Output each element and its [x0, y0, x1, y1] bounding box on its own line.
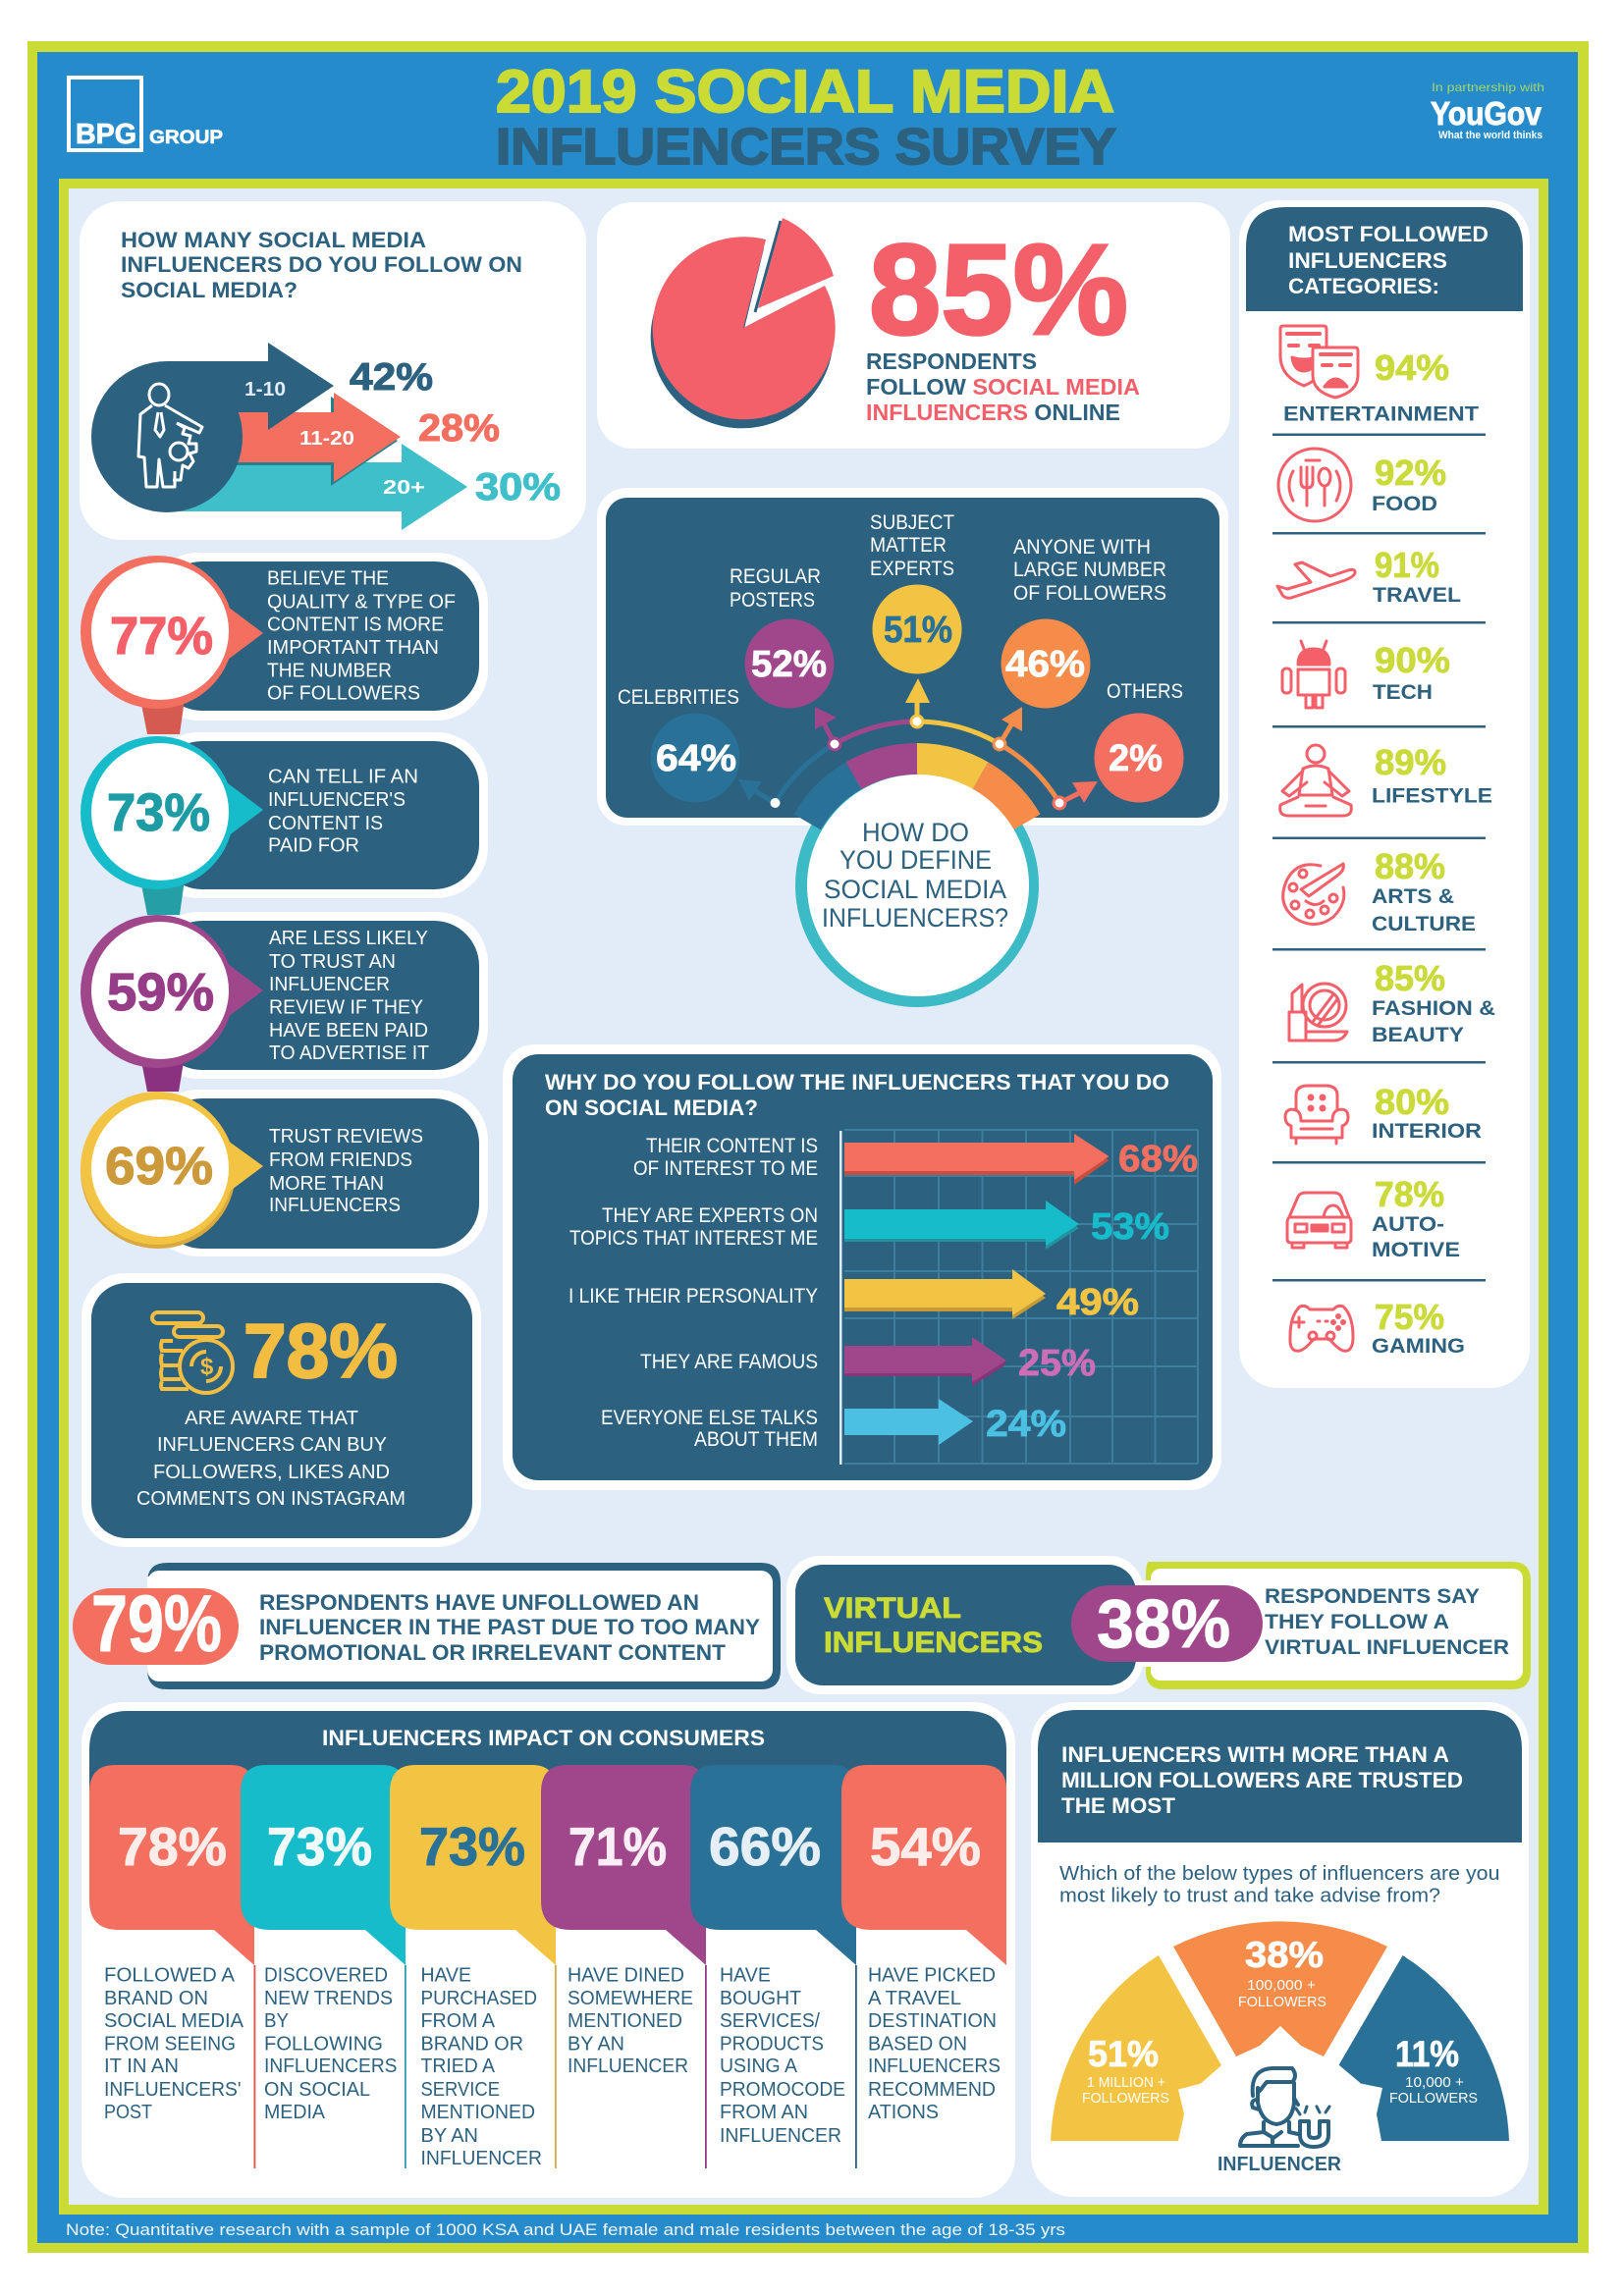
text: quality over followers: THE NUMBER	[267, 660, 392, 681]
text: unfollowed reason: PROMOTIONAL OR IRRELEVANT CONTENT	[259, 1640, 727, 1665]
heading: how many influencers: INFLUENCERS DO YOU FOLLOW ON	[121, 252, 522, 277]
stat circle: regular posters 52 percent: 52%	[751, 644, 827, 685]
text: travel destination: INFLUENCERS	[868, 2055, 1001, 2077]
text: follow virtual: VIRTUAL INFLUENCER	[1265, 1636, 1509, 1659]
text: less likely to trust: TO ADVERTISE IT	[269, 1042, 429, 1064]
panel: 78 percent buy followers: $	[200, 1354, 214, 1380]
text: aware can buy followers: FOLLOWERS, LIKES AND	[153, 1462, 390, 1483]
row: travel	[1277, 545, 1461, 607]
text: followed a brand: SOCIAL MEDIA	[104, 2009, 244, 2032]
row: gaming: 75%	[1375, 1297, 1444, 1337]
bar arrow: 24 percent	[844, 1399, 1066, 1445]
row: gaming: GAMING	[1372, 1335, 1465, 1358]
text: quality over followers	[267, 567, 456, 705]
text: discovered new trends: MEDIA	[264, 2101, 325, 2123]
icon: lipstick and mirror	[1289, 984, 1347, 1041]
segment: 51 percent: 51%	[1088, 2034, 1159, 2074]
stat circle: celebrities 64 percent: 64%	[656, 738, 736, 779]
text: can tell if paid: INFLUENCER'S	[268, 789, 406, 811]
text: follow virtual: RESPONDENTS SAY	[1265, 1585, 1480, 1608]
text: followed a brand	[104, 1963, 244, 2123]
partner logo: YouGov: In partnership with	[1432, 80, 1544, 94]
icon: palette	[1283, 864, 1344, 925]
row: fashion and beauty: BEAUTY	[1372, 1024, 1464, 1046]
text: discovered new trends: DISCOVERED	[264, 1963, 388, 1987]
text: have dined: BY AN	[568, 2032, 624, 2056]
panel: 78 percent buy followers	[81, 1273, 481, 1547]
heading: impact: INFLUENCERS IMPACT ON CONSUMERS	[322, 1726, 765, 1750]
row: lifestyle: 89%	[1375, 742, 1446, 782]
row: tech: TECH	[1373, 681, 1433, 704]
card: 54 percent	[841, 1765, 1006, 2123]
arcs and arrows to circles	[738, 678, 1098, 809]
card: 73 percent discovered	[241, 1765, 406, 2168]
pill: 77 percent	[81, 553, 488, 734]
stat circle: celebrities 64 percent	[650, 713, 740, 803]
bar labels: THEIR CONTENT IS	[646, 1135, 818, 1157]
text: travel destination: A TRAVEL	[868, 1987, 961, 2009]
text: have dined: MENTIONED	[568, 2009, 682, 2032]
row: food	[1278, 449, 1446, 521]
text: respondents follow: INFLUENCERS ONLINE	[866, 400, 1120, 425]
text: less likely to trust: INFLUENCER	[269, 974, 390, 995]
card: 78 percent: 78%	[118, 1816, 227, 1877]
logo: BPG Group: BPG	[76, 119, 136, 150]
text: discovered new trends: ON SOCIAL	[264, 2078, 370, 2101]
row: entertainment: ENTERTAINMENT	[1283, 402, 1479, 426]
text: less likely to trust: TO TRUST AN	[269, 951, 396, 973]
card: 66 percent: 66%	[709, 1816, 821, 1877]
text: bought using promocode	[720, 1963, 845, 2147]
icon: meditating person	[1280, 745, 1351, 816]
row: tech	[1282, 640, 1450, 708]
center circle: how do you define	[793, 743, 1041, 1007]
chart: gauge	[1051, 1921, 1509, 2175]
segment: 11 percent: 11%	[1395, 2034, 1459, 2074]
text: discovered new trends: FOLLOWING	[264, 2032, 383, 2056]
icon: person with gear	[138, 384, 202, 487]
text: quality over followers: BELIEVE THE	[267, 567, 389, 589]
stat circle: regular posters 52 percent	[744, 618, 835, 709]
text: less likely to trust: HAVE BEEN PAID	[269, 1020, 428, 1041]
panel: most followed categories	[1239, 200, 1530, 1388]
logo: BPG Group: GROUP	[149, 128, 223, 148]
card: 66 percent	[690, 1765, 857, 2168]
pill: 59 percent: 59%	[107, 963, 214, 1022]
text: less likely to trust: REVIEW IF THEY	[269, 997, 423, 1019]
icon: game controller	[1290, 1306, 1353, 1351]
arrow: 20+: 20+	[383, 477, 425, 499]
heading: how many influencers: HOW MANY SOCIAL MEDIA	[121, 228, 426, 252]
segment: 11 percent: 10,000 +	[1405, 2074, 1464, 2091]
labels: definition categories: OF FOLLOWERS	[1013, 582, 1166, 605]
panel: why follow bar chart	[503, 1044, 1221, 1490]
text: how do you define	[822, 818, 1008, 933]
arrow: 1-10: 1-10	[244, 379, 286, 400]
pill: 77 percent: 77%	[110, 607, 213, 666]
row: travel: TRAVEL	[1373, 584, 1461, 607]
text: how do you define: HOW DO	[862, 818, 969, 847]
title: INFLUENCERS SURVEY	[496, 119, 1116, 176]
row: entertainment	[1280, 326, 1479, 426]
icon: coins	[152, 1312, 233, 1393]
labels: definition categories: OTHERS	[1107, 680, 1183, 703]
text: can tell if paid: PAID FOR	[268, 834, 359, 856]
row: arts and culture: ARTS &	[1372, 885, 1454, 908]
panel: virtual influencers: VIRTUAL	[824, 1592, 961, 1625]
heading: most followed: CATEGORIES:	[1288, 274, 1439, 298]
chart: pie 85 percent	[651, 218, 836, 428]
bar arrow: 25 percent: 25%	[1018, 1343, 1096, 1384]
stat circle: experts 51 percent: 51%	[884, 610, 952, 651]
bar labels: TOPICS THAT INTEREST ME	[569, 1227, 818, 1250]
text: bought using promocode: HAVE	[720, 1963, 771, 1987]
row: fashion and beauty	[1289, 958, 1495, 1046]
text: followed a brand: POST	[104, 2101, 152, 2123]
card: 73 percent purchased: 73%	[419, 1816, 525, 1877]
panel: most trusted influencers	[1031, 1702, 1529, 2197]
text: followed a brand: FROM SEEING	[104, 2032, 236, 2056]
bar arrow: 53 percent	[844, 1201, 1169, 1250]
labels: definition categories: MATTER	[870, 534, 947, 557]
text: purchased from a brand: TRIED A	[420, 2055, 495, 2077]
bar labels: EVERYONE ELSE TALKS	[601, 1407, 818, 1429]
callout: 79 percent unfollowed	[73, 1563, 781, 1689]
labels: definition categories: ANYONE WITH	[1013, 536, 1151, 559]
arrow: 11-20	[167, 393, 500, 486]
arrow: 1-10: 42%	[350, 356, 433, 399]
text: followed a brand: FOLLOWED A	[104, 1963, 235, 1987]
stat circle: large following 46 percent: 46%	[1005, 644, 1085, 685]
bar arrow: 68 percent	[844, 1134, 1198, 1185]
row: arts and culture: 88%	[1375, 846, 1445, 886]
heading: most trusted	[1038, 1710, 1522, 1842]
pill: 73 percent: 73%	[107, 783, 210, 842]
icon: android	[1282, 641, 1345, 708]
text: have dined	[568, 1963, 693, 2077]
text: unfollowed reason: RESPONDENTS HAVE UNFOLLOWED AN	[259, 1590, 699, 1615]
heading: most trusted: THE MOST	[1061, 1793, 1176, 1818]
text: discovered new trends	[264, 1963, 397, 2123]
row: lifestyle: LIFESTYLE	[1372, 785, 1492, 807]
stat circle: experts 51 percent	[872, 585, 962, 673]
stat: 78 percent: 78%	[244, 1308, 398, 1394]
panel: how many influencers	[80, 201, 586, 540]
bar labels	[568, 1135, 818, 1451]
text: how do you define: YOU DEFINE	[839, 845, 992, 875]
heading: most followed: MOST FOLLOWED	[1288, 222, 1489, 246]
arrow: 1-10	[167, 343, 433, 430]
text: travel destination	[868, 1963, 1001, 2123]
ring segments	[793, 743, 1041, 830]
text: discovered new trends: INFLUENCERS	[264, 2055, 397, 2077]
row: tech: 90%	[1375, 640, 1450, 680]
row: arts and culture: CULTURE	[1372, 913, 1476, 935]
labels: definition categories	[618, 511, 1183, 709]
text: purchased from a brand: INFLUENCER	[420, 2147, 542, 2169]
text: can tell if paid	[268, 766, 418, 856]
text: travel destination: HAVE PICKED	[868, 1963, 996, 1987]
labels: definition categories: REGULAR	[730, 565, 821, 588]
heading: why follow	[545, 1070, 1169, 1120]
text: trust friends: TRUST REVIEWS	[269, 1126, 423, 1148]
icon: theatre masks	[1280, 326, 1358, 398]
card: 73 percent discovered: 73%	[267, 1816, 372, 1877]
heading: how many influencers	[121, 228, 522, 302]
text: how do you define: SOCIAL MEDIA	[824, 875, 1006, 904]
partner logo: YouGov: What the world thinks	[1438, 130, 1543, 141]
bar labels: I LIKE THEIR PERSONALITY	[568, 1285, 818, 1308]
text: purchased from a brand: MENTIONED	[420, 2101, 535, 2123]
text: have dined: HAVE DINED	[568, 1963, 684, 1987]
text: bought using promocode: SERVICES/	[720, 2009, 820, 2032]
text: purchased from a brand: BRAND OR	[420, 2032, 523, 2056]
segment: 38 percent: 38%	[1245, 1935, 1324, 1975]
text: trust question: Which of the below types of influencers are you	[1059, 1863, 1500, 1885]
arrow: 20+	[167, 444, 561, 530]
arrow: 20+: 30%	[475, 466, 561, 508]
text: bought using promocode: INFLUENCER	[720, 2124, 841, 2147]
text: follow virtual: THEY FOLLOW A	[1265, 1611, 1449, 1633]
card: 54 percent: 54%	[870, 1816, 981, 1877]
labels: definition categories: POSTERS	[730, 589, 815, 612]
card: 71 percent	[541, 1765, 707, 2168]
text: purchased from a brand: SERVICE	[420, 2078, 500, 2101]
labels: definition categories: SUBJECT	[870, 511, 954, 534]
labels: definition categories: LARGE NUMBER	[1013, 559, 1166, 581]
text: unfollowed reason	[259, 1590, 760, 1665]
panel: impact on consumers	[81, 1702, 1015, 2198]
text: less likely to trust: ARE LESS LIKELY	[269, 928, 428, 949]
row: automotive: MOTIVE	[1372, 1239, 1460, 1261]
text: respondents follow: RESPONDENTS	[866, 348, 1037, 374]
text: have dined: INFLUENCER	[568, 2055, 688, 2077]
stat circle: large following 46 percent	[1001, 618, 1090, 709]
bar labels: THEY ARE EXPERTS ON	[602, 1204, 818, 1227]
card: 71 percent: 71%	[568, 1816, 667, 1877]
row: automotive	[1287, 1174, 1460, 1261]
badge: 79 percent: 79%	[91, 1579, 222, 1669]
bar labels: OF INTEREST TO ME	[633, 1157, 818, 1180]
stat: 85 percent: 85%	[869, 217, 1128, 361]
pill: 59 percent	[81, 912, 488, 1092]
labels: definition categories: CELEBRITIES	[618, 686, 739, 709]
panel: virtual influencers	[786, 1556, 1143, 1694]
text: purchased from a brand: PURCHASED	[420, 1987, 537, 2009]
heading: most followed	[1246, 207, 1523, 311]
segment: 38 percent: FOLLOWERS	[1238, 1994, 1326, 2010]
text: trust question: most likely to trust and take advise from?	[1059, 1885, 1440, 1906]
pill: 73 percent	[81, 732, 488, 915]
bar arrow: 49 percent: 49%	[1056, 1282, 1139, 1323]
row: lifestyle	[1280, 742, 1492, 816]
segment: 11 percent	[1339, 1955, 1509, 2141]
title: 2019 SOCIAL MEDIA	[496, 58, 1114, 125]
panel: virtual influencers: INFLUENCERS	[824, 1627, 1043, 1659]
text: discovered new trends: BY	[264, 2009, 289, 2032]
panel: 85 percent	[597, 202, 1230, 449]
heading: why follow: WHY DO YOU FOLLOW THE INFLUENCERS THAT YOU DO	[545, 1070, 1169, 1095]
row: travel: 91%	[1375, 545, 1439, 585]
text: followed a brand: INFLUENCERS'	[104, 2078, 242, 2101]
text: quality over followers: OF FOLLOWERS	[267, 683, 420, 705]
text: quality over followers: QUALITY & TYPE OF	[267, 591, 456, 613]
text: aware can buy followers: INFLUENCERS CAN BUY	[157, 1434, 387, 1456]
heading: most trusted: INFLUENCERS WITH MORE THAN A	[1061, 1742, 1449, 1767]
icon: plane	[1277, 562, 1355, 598]
text: bought using promocode: BOUGHT	[720, 1987, 801, 2009]
stat circle: others 2 percent	[1094, 713, 1184, 803]
icon: car	[1287, 1193, 1351, 1248]
bar arrow: 49 percent	[844, 1269, 1139, 1323]
text: have dined: SOMEWHERE	[568, 1987, 693, 2009]
row: fashion and beauty: FASHION &	[1372, 997, 1495, 1020]
partner logo: YouGov: YouGov	[1431, 95, 1543, 132]
heading: how many influencers: SOCIAL MEDIA?	[121, 278, 298, 302]
row: food: 92%	[1375, 453, 1446, 493]
text: aware can buy followers: COMMENTS ON INSTAGRAM	[136, 1488, 406, 1510]
callout: 38 percent virtual	[1071, 1562, 1531, 1689]
partner logo: YouGov	[1431, 80, 1544, 141]
text: unfollowed reason: INFLUENCER IN THE PAST DUE TO TOO MANY	[259, 1615, 760, 1639]
text: bought using promocode: FROM AN	[720, 2101, 808, 2123]
text: followed a brand: BRAND ON	[104, 1987, 208, 2009]
labels: definition categories: EXPERTS	[870, 558, 954, 580]
text: bought using promocode: USING A	[720, 2055, 797, 2077]
text: bought using promocode: PROMOCODE	[720, 2078, 845, 2101]
segment: 51 percent: 1 MILLION +	[1087, 2074, 1165, 2091]
text: trust friends: MORE THAN	[269, 1173, 384, 1195]
text: aware can buy followers: ARE AWARE THAT	[185, 1408, 358, 1429]
segment: 11 percent: FOLLOWERS	[1389, 2090, 1478, 2107]
icon: armchair	[1285, 1086, 1348, 1144]
icon: influencer with magnet	[1240, 2068, 1329, 2147]
arrow: 11-20: 11-20	[299, 428, 354, 450]
pill: 69 percent: 69%	[105, 1137, 213, 1196]
title	[496, 58, 1116, 176]
text: travel destination: DESTINATION	[868, 2009, 997, 2032]
text: quality over followers: IMPORTANT THAN	[267, 637, 439, 659]
text: purchased from a brand	[420, 1963, 542, 2169]
bar arrow: 24 percent: 24%	[986, 1404, 1066, 1445]
heading: most trusted: MILLION FOLLOWERS ARE TRUSTED	[1061, 1768, 1463, 1792]
row: interior: 80%	[1375, 1082, 1449, 1122]
pill: 69 percent	[81, 1090, 488, 1256]
row: automotive: AUTO-	[1372, 1213, 1444, 1236]
row: interior	[1285, 1082, 1482, 1144]
text: purchased from a brand: FROM A	[420, 2009, 495, 2032]
text: travel destination: RECOMMEND	[868, 2078, 996, 2101]
badge: 38 percent: 38%	[1097, 1585, 1230, 1662]
text: how do you define: INFLUENCERS?	[822, 903, 1008, 933]
logo: BPG Group	[69, 78, 223, 150]
row: fashion and beauty: 85%	[1375, 958, 1445, 998]
text: quality over followers: CONTENT IS MORE	[267, 614, 444, 636]
segment: 38 percent	[1173, 1921, 1387, 2056]
bar arrow: 25 percent	[844, 1337, 1096, 1386]
card: 73 percent purchased	[390, 1765, 557, 2169]
bar labels: THEY ARE FAMOUS	[640, 1351, 818, 1373]
arrow: 11-20: 28%	[418, 407, 500, 450]
footnote: Note: Quantitative research with a sample of 1000 KSA and UAE female and male residents between the age of 18-35 yrs	[66, 2220, 1065, 2239]
text: can tell if paid: CAN TELL IF AN	[268, 766, 418, 787]
text: travel destination: ATIONS	[868, 2101, 939, 2123]
text: follow virtual	[1265, 1585, 1509, 1659]
heading: most followed: INFLUENCERS	[1288, 248, 1447, 273]
text: respondents follow	[866, 348, 1140, 425]
row: automotive: 78%	[1375, 1174, 1444, 1214]
text: trust friends	[269, 1126, 423, 1216]
text: aware can buy followers	[136, 1408, 406, 1510]
text: discovered new trends: NEW TRENDS	[264, 1987, 393, 2009]
row: gaming	[1290, 1297, 1465, 1358]
text: trust friends: FROM FRIENDS	[269, 1149, 412, 1171]
segment: 38 percent: 100,000 +	[1247, 1977, 1316, 1994]
text: trust friends: INFLUENCERS	[269, 1195, 401, 1216]
bar arrow: 68 percent: 68%	[1118, 1139, 1198, 1180]
text: respondents follow: FOLLOW SOCIAL MEDIA	[866, 374, 1140, 400]
text: purchased from a brand: HAVE	[420, 1963, 471, 1987]
text: trust question	[1059, 1863, 1500, 1906]
panel: how do you define influencers	[597, 488, 1228, 826]
segment: 51 percent	[1051, 1955, 1221, 2141]
bar arrow: 53 percent: 53%	[1091, 1206, 1169, 1248]
text: less likely to trust	[269, 928, 429, 1064]
row: interior: INTERIOR	[1372, 1120, 1482, 1143]
icon: plate with cutlery	[1278, 449, 1351, 521]
text: bought using promocode: PRODUCTS	[720, 2032, 824, 2056]
row: entertainment: 94%	[1375, 347, 1449, 388]
text: can tell if paid: CONTENT IS	[268, 813, 383, 834]
text: followed a brand: IT IN AN	[104, 2055, 179, 2077]
bar labels: ABOUT THEM	[694, 1428, 818, 1451]
card: 78 percent	[89, 1765, 255, 2168]
heading: why follow: ON SOCIAL MEDIA?	[545, 1095, 758, 1120]
label: influencer: INFLUENCER	[1218, 2154, 1342, 2175]
row: arts and culture	[1283, 846, 1476, 935]
segment: 51 percent: FOLLOWERS	[1082, 2090, 1169, 2107]
row: food: FOOD	[1372, 493, 1437, 515]
stat circle: others 2 percent: 2%	[1109, 738, 1163, 779]
text: purchased from a brand: BY AN	[420, 2124, 478, 2147]
text: travel destination: BASED ON	[868, 2032, 967, 2056]
